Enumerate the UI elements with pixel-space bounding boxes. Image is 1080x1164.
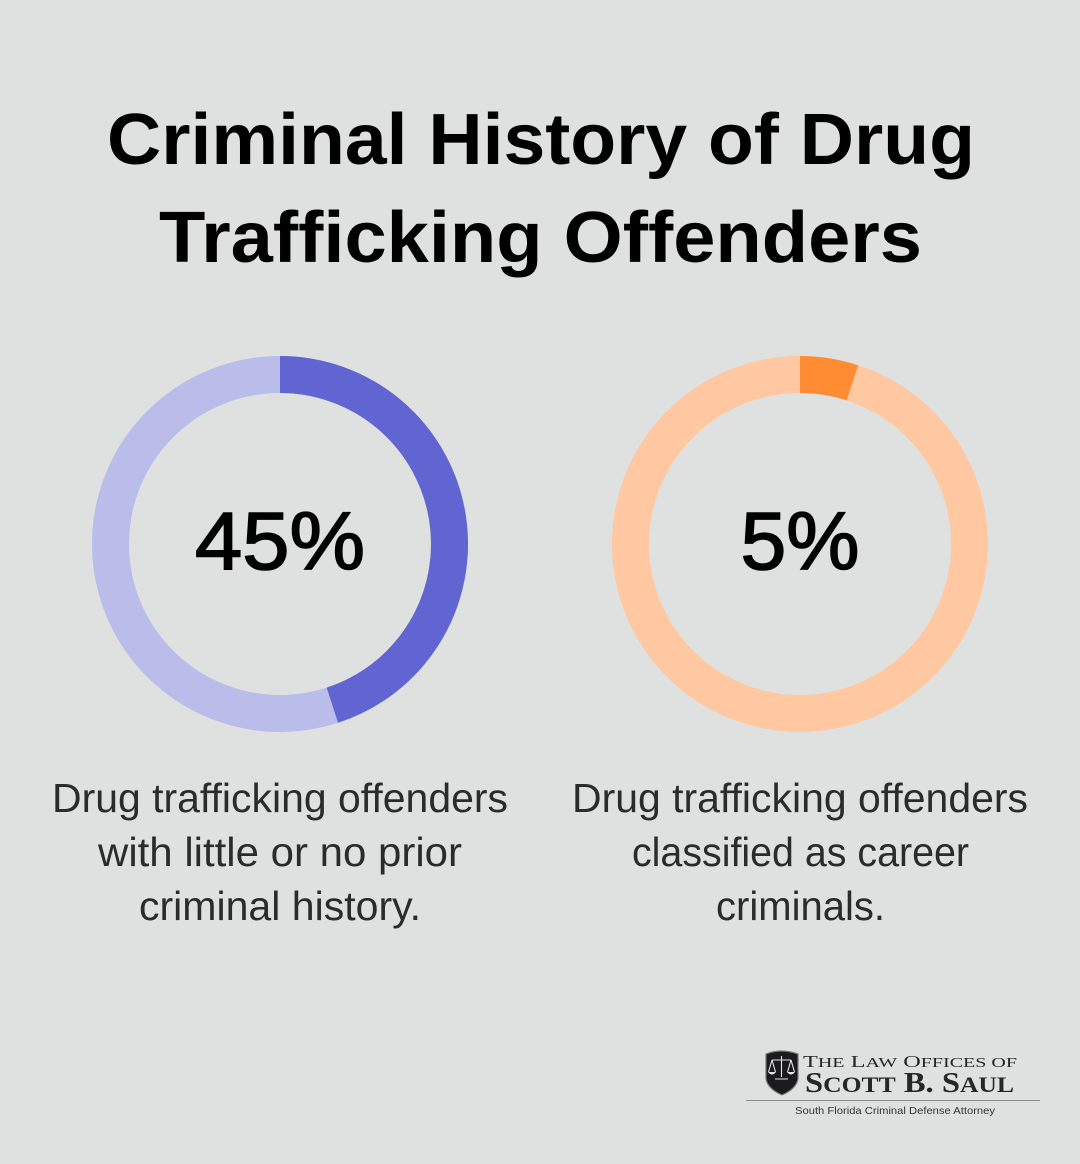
title: Trafficking Offenders: [159, 198, 922, 278]
icon: shield with scales: [766, 1051, 798, 1095]
panel: 45% statistic: [52, 374, 508, 929]
logo firm name: SCOTT B. S AUL: [805, 1068, 1014, 1099]
description: little or no prior history: with little or no prior: [97, 829, 462, 875]
description: career criminals: criminals.: [716, 883, 885, 929]
donut chart: 5%: [630, 374, 970, 714]
value: 45%: 45%: [195, 496, 365, 587]
panel: 5% statistic: [572, 374, 1028, 929]
description: little or no prior history: criminal history.: [139, 883, 421, 929]
description: career criminals: Drug trafficking offenders: [572, 775, 1028, 821]
logo firm name: [803, 1052, 1017, 1099]
description: career criminals: [572, 775, 1028, 929]
description: little or no prior history: Drug trafficking offenders: [52, 775, 508, 821]
donut chart: 45%: [110, 374, 450, 714]
title: Criminal History of Drug: [107, 100, 975, 180]
logo tagline: South Florida Criminal Defense Attorney: [795, 1105, 996, 1117]
title: [107, 100, 975, 278]
description: little or no prior history: [52, 775, 508, 929]
value: 5%: 5%: [740, 496, 860, 587]
logo: The Law Offices of Scott B. Saul: [746, 1051, 1040, 1117]
description: career criminals: classified as career: [632, 829, 969, 875]
logo firm name: T HE L AW O FFICES OF: [803, 1052, 1017, 1071]
